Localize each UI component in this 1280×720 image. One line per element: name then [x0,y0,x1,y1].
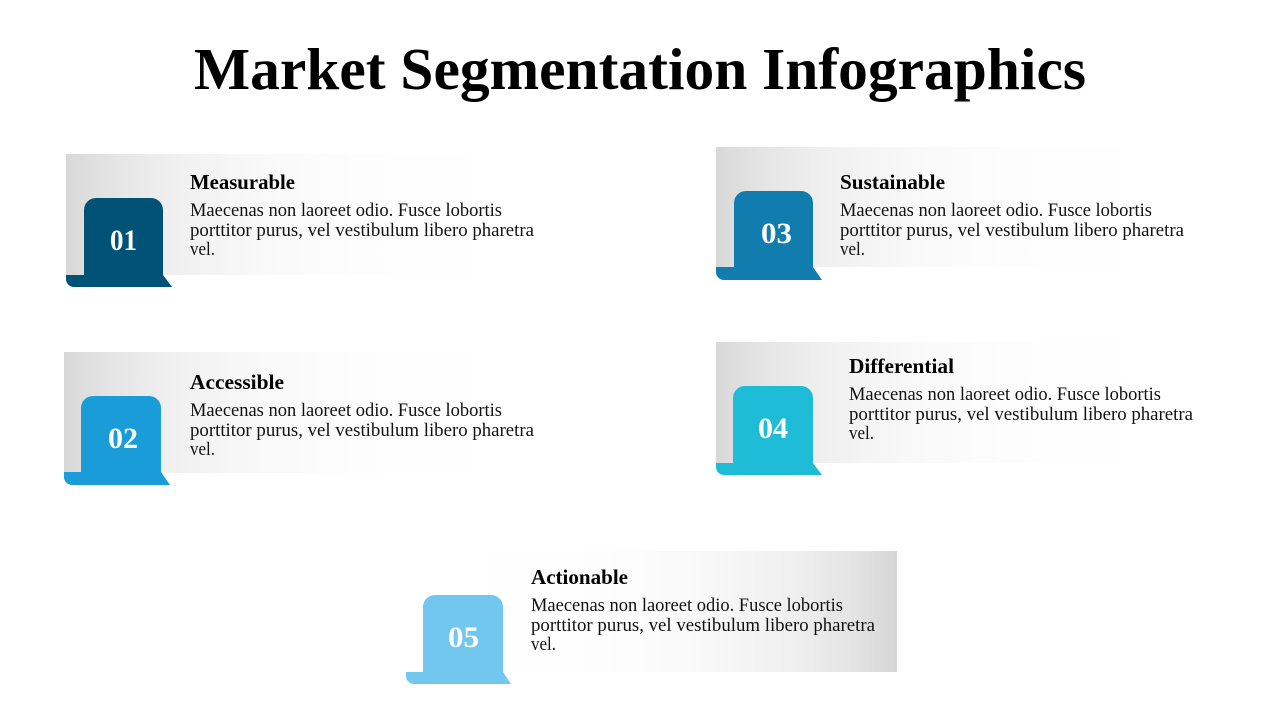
body text: Maecenas non laoreet odio. Fusce lobortis [190,401,502,421]
heading: Sustainable [840,170,945,194]
number: 02 [108,422,138,455]
heading: Differential [849,354,954,378]
heading: Actionable [531,565,628,589]
number: 05 [448,621,479,654]
number tag 04 [716,386,822,475]
body text: vel. [849,424,874,444]
body text: porttitor purus, vel vestibulum libero pharetra [190,221,534,241]
panel: 04 Differential [716,342,1193,475]
body text: Maecenas non laoreet odio. Fusce lobortis [190,201,502,221]
body text [190,201,534,260]
body text: Maecenas non laoreet odio. Fusce lobortis [849,385,1161,405]
body text: porttitor purus, vel vestibulum libero pharetra [531,616,875,636]
heading: Measurable [190,170,295,194]
body text: vel. [190,240,215,260]
body text: porttitor purus, vel vestibulum libero pharetra [190,421,534,441]
number tag 05 [406,595,511,684]
number: 04 [758,412,788,445]
panel background [463,551,897,672]
panel: 01 Measurable [66,154,534,287]
number: 01 [110,224,137,257]
body text: vel. [840,240,865,260]
body text: vel. [531,635,556,655]
body text [531,596,875,655]
panel background [716,147,1150,267]
body text: vel. [190,440,215,460]
number tag 02 [64,396,170,485]
heading: Accessible [190,370,284,394]
panel: 05 Actionable [406,551,897,684]
number tag 03 [716,191,822,280]
body text [849,385,1193,444]
number tag 01 [66,198,172,287]
panel background [66,154,500,275]
panel background [716,342,1150,463]
body text: porttitor purus, vel vestibulum libero pharetra [840,221,1184,241]
body text: Maecenas non laoreet odio. Fusce lobortis [531,596,843,616]
panel: 02 Accessible [64,352,534,485]
number: 03 [761,217,792,250]
body text [190,401,534,460]
panel: 03 Sustainable [716,147,1184,280]
title: Market Segmentation Infographics [194,36,1086,102]
body text: Maecenas non laoreet odio. Fusce lobortis [840,201,1152,221]
body text [840,201,1184,260]
body text: porttitor purus, vel vestibulum libero pharetra [849,405,1193,425]
panel background [64,352,498,473]
